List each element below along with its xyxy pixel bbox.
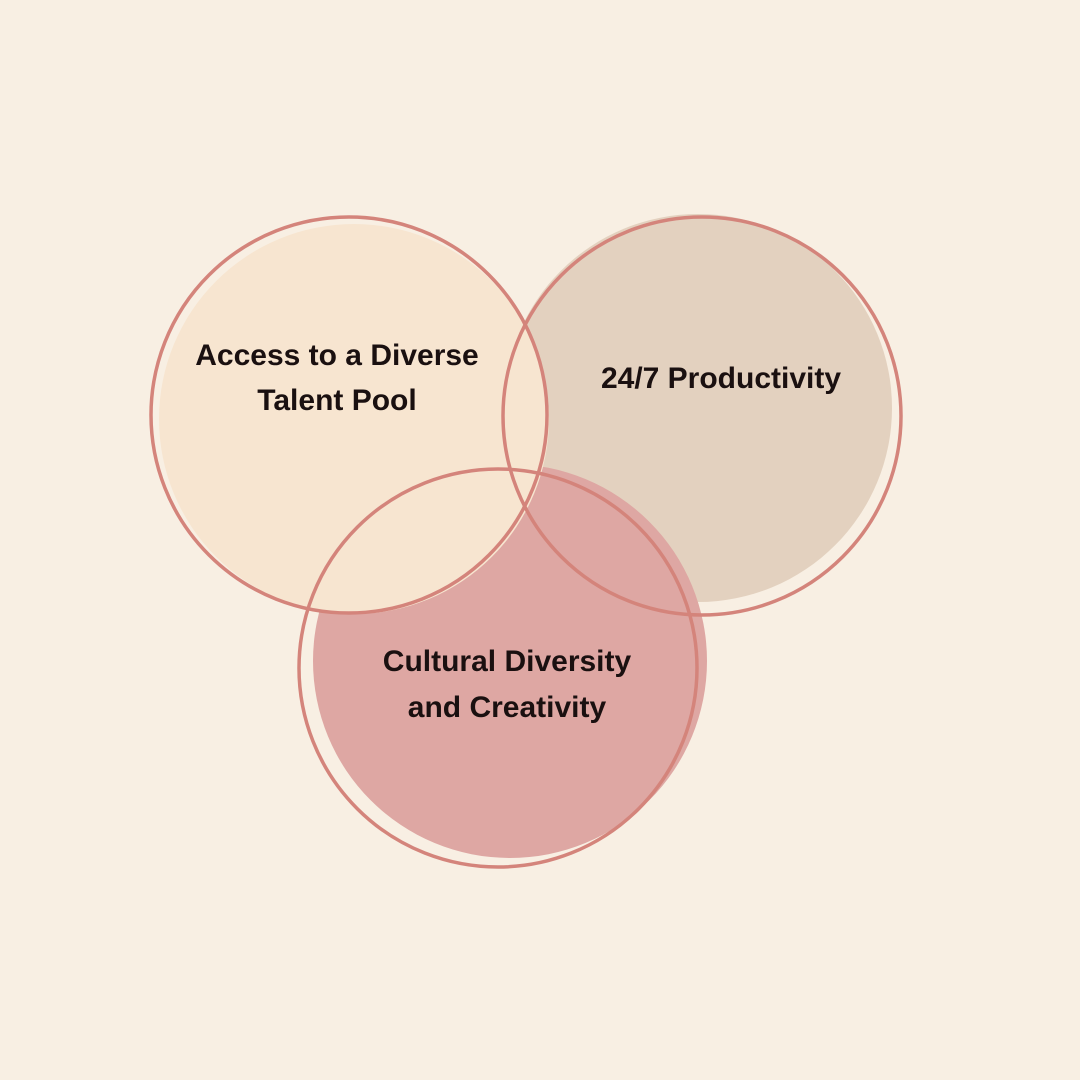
label: diverse talent pool: Access to a Diverse <box>195 339 479 372</box>
circle fill: diverse talent pool <box>159 224 549 614</box>
label: 24/7 productivity: 24/7 Productivity <box>601 362 841 395</box>
circle outline: 24/7 productivity <box>503 217 901 615</box>
circle outline: diverse talent pool <box>151 217 547 613</box>
circle outline: cultural diversity <box>299 469 697 867</box>
circle fill: cultural diversity <box>313 464 707 858</box>
circle fill: 24/7 productivity <box>504 214 892 602</box>
label: diverse talent pool: Talent Pool <box>257 384 417 417</box>
label: cultural diversity: Cultural Diversity <box>383 645 631 678</box>
label: cultural diversity: and Creativity <box>408 691 607 724</box>
